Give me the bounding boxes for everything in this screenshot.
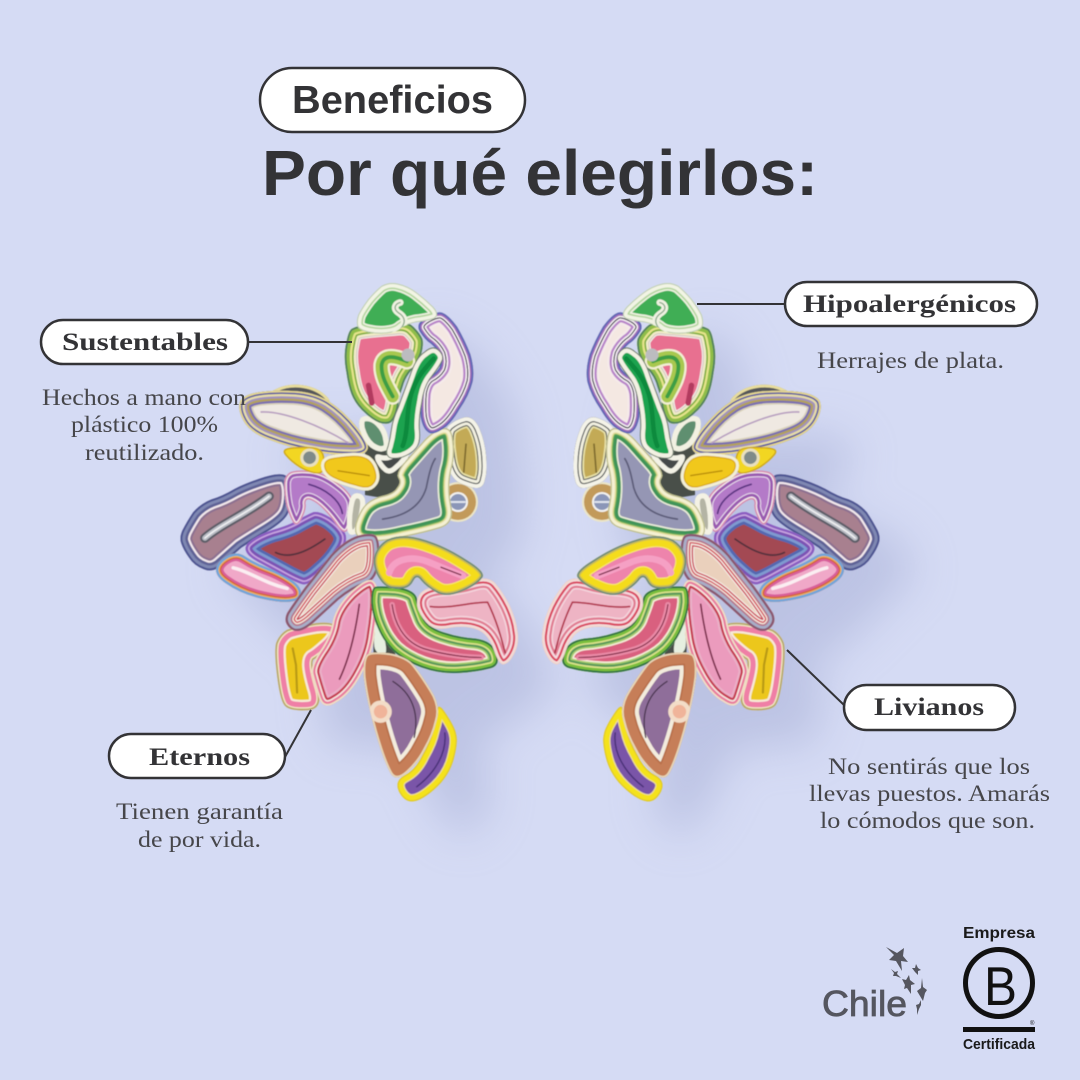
petal: upper dark sliver	[269, 385, 330, 403]
petal: tan bead	[438, 482, 478, 522]
earring: left	[181, 283, 518, 801]
text: Sustentables description: reutilizado.	[85, 440, 204, 465]
text: Livianos description: lo cómodos que son.	[820, 808, 1035, 833]
logo: B Corp: Certificada	[963, 1036, 1036, 1053]
label: Hipoalergénicos: Hipoalergénicos	[803, 291, 1016, 318]
connector: Sustentables	[248, 341, 352, 343]
badge: Beneficios	[260, 68, 525, 132]
petal: lavender white	[239, 391, 368, 455]
text: Sustentables description: plástico 100%	[71, 412, 218, 437]
petal: pink red	[312, 580, 378, 706]
text: Sustentables description: Hechos a mano con	[42, 385, 247, 410]
petal: golden yellow	[321, 453, 379, 491]
petal: white pill	[347, 493, 365, 535]
label: Livianos	[844, 685, 1015, 730]
title: Por qué elegirlos:	[262, 137, 818, 209]
connector: Livianos	[787, 650, 844, 705]
earring shadows	[226, 327, 918, 839]
petal: pink lower left	[275, 623, 338, 710]
label: Eternos: Eternos	[149, 744, 250, 771]
petal: bottom brown purple	[364, 653, 438, 777]
label: Eternos	[109, 734, 285, 778]
text: Eternos description: Tienen garantía	[116, 799, 283, 824]
dark backing	[365, 445, 415, 668]
text: Sustentables description	[42, 385, 247, 465]
petal: green cap	[357, 283, 437, 337]
logo: B Corp	[963, 925, 1036, 1053]
petal: yellow with bead	[284, 447, 325, 474]
bead: silver	[402, 348, 414, 362]
connector: Eternos	[285, 710, 311, 757]
petal: green grey chevron	[355, 428, 454, 541]
petal: purple	[284, 471, 354, 532]
label: Sustentables	[41, 320, 248, 364]
petal: green worm	[386, 348, 443, 459]
petal: white heart	[375, 452, 409, 474]
text: Eternos description	[116, 799, 283, 852]
logo: B Corp: Empresa	[963, 925, 1035, 942]
text: Hipoalergénicos description: Herrajes de plata.	[817, 348, 1004, 373]
petal: far left grey-blue	[181, 474, 292, 570]
text: Livianos description: llevas puestos. Amarás	[809, 781, 1050, 806]
petal: blue sliver	[216, 554, 301, 602]
petal: purple white	[418, 312, 473, 433]
logo: Chile	[822, 947, 927, 1024]
petal: bottom yellow purple	[398, 707, 457, 801]
logo: Chile: Chile	[822, 983, 907, 1024]
petal: striped diagonal	[286, 534, 379, 631]
petal: green pink L	[371, 587, 498, 673]
connector: Hipoalergénicos	[697, 303, 785, 305]
badge: Beneficios: Beneficios	[292, 79, 493, 122]
petal: pink green block	[345, 322, 423, 424]
label: Sustentables: Sustentables	[62, 329, 228, 356]
petal: white loop	[359, 416, 389, 451]
label: Hipoalergénicos	[785, 282, 1037, 326]
logo: B Corp: ®	[1030, 1020, 1035, 1027]
petal: yellow pink arc	[374, 536, 483, 595]
logo: B Corp: B	[984, 955, 1017, 1017]
petal: pink right	[417, 579, 518, 664]
petal: olive right	[445, 417, 487, 488]
label: Livianos: Livianos	[874, 694, 984, 721]
petal: white pill lower	[374, 625, 386, 655]
text: Eternos description: de por vida.	[138, 827, 261, 852]
text: Livianos description	[809, 754, 1050, 833]
text: Livianos description: No sentirás que los	[828, 754, 1030, 779]
petal: maroon chevron	[246, 512, 346, 584]
earring: right (mirrored)	[542, 283, 879, 801]
